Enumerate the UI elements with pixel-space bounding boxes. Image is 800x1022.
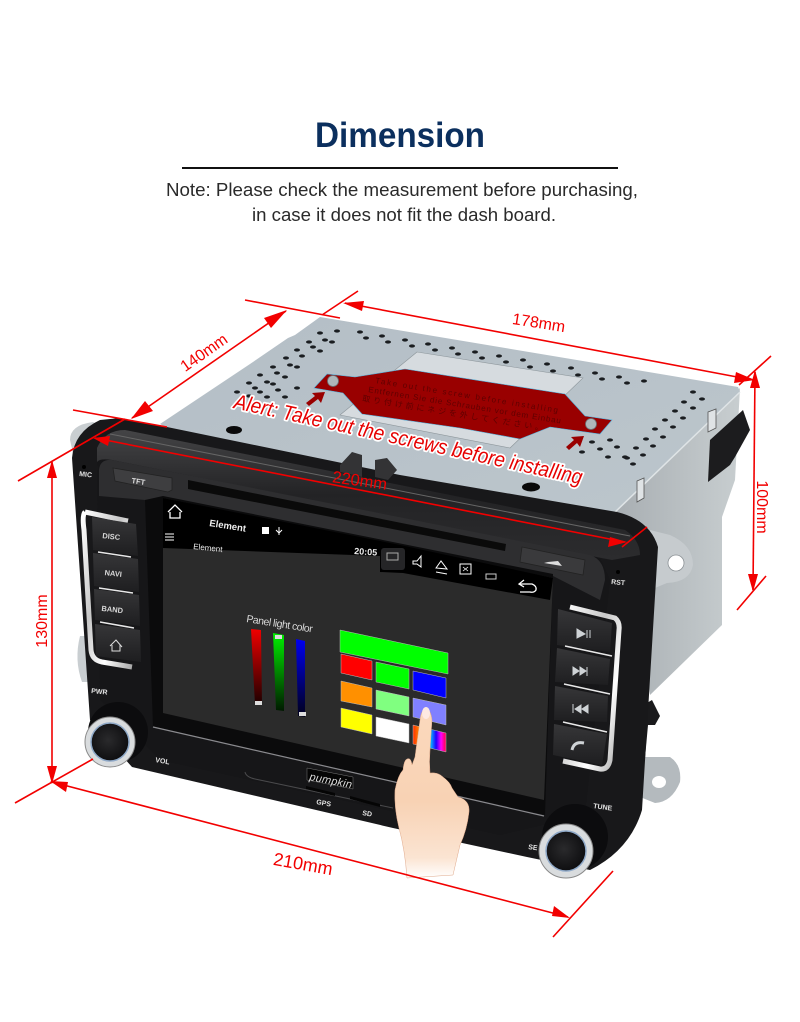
panel labels: SE <box>528 844 538 852</box>
panel labels: GPS <box>316 799 332 809</box>
vent holes <box>234 329 705 466</box>
panel labels: SD <box>362 810 372 819</box>
gloss line on bevel <box>110 434 630 536</box>
TFT button <box>113 468 172 492</box>
top center clips <box>340 452 397 480</box>
icon: speaker <box>413 556 421 567</box>
icon: home <box>168 505 182 518</box>
BAND button <box>94 589 140 626</box>
left buttons <box>92 517 141 662</box>
screen frame <box>145 496 553 815</box>
panel labels: PWR <box>91 688 108 697</box>
dimension: 220mm <box>93 436 647 547</box>
pumpkin logo: pumpkin <box>307 771 353 791</box>
DISC button <box>92 517 138 556</box>
right chrome bracket <box>563 607 619 769</box>
dimension: 140mm <box>18 310 287 481</box>
black side clip <box>708 410 750 482</box>
right knob <box>539 804 608 878</box>
icon: pointing hand <box>395 707 469 878</box>
left knob <box>85 702 148 767</box>
NAVI button <box>93 553 139 592</box>
large mounting holes <box>226 426 242 434</box>
clock: 20:05 <box>354 546 378 558</box>
previous button <box>554 686 608 722</box>
dimension: 130mm <box>15 460 93 803</box>
heading: Element: Element <box>209 518 248 535</box>
lower bezel gloss <box>153 727 544 816</box>
red warning label: Entfernen Sie die Schrauben vor dem Einbau <box>368 385 562 425</box>
dimension: 220mm: 220mm <box>331 468 388 494</box>
chassis top plate <box>160 317 740 515</box>
screws <box>328 376 596 430</box>
panel labels <box>79 471 626 852</box>
NAVI button: NAVI <box>104 568 122 579</box>
dimension: 210mm <box>50 781 613 937</box>
upper gray panel section <box>99 460 605 600</box>
color swatches <box>340 630 448 752</box>
icon: menu <box>165 534 174 540</box>
left mounting tabs <box>70 422 105 682</box>
panel labels: VOL <box>155 757 171 767</box>
green slider <box>273 633 284 711</box>
panel light color sliders <box>246 613 314 717</box>
inner black panel <box>97 459 610 835</box>
note text <box>166 179 638 225</box>
red warning label <box>314 369 612 439</box>
edge between top and side <box>612 392 740 515</box>
chassis side panel <box>615 388 740 695</box>
play pause button <box>557 609 612 652</box>
top bevel band <box>97 430 640 560</box>
screen status icons and labels <box>165 505 536 592</box>
MIC and RST holes <box>82 465 620 574</box>
call button <box>553 724 607 765</box>
dimension: 178mm: 178mm <box>511 311 566 336</box>
BAND button: BAND <box>101 604 124 615</box>
status bar <box>163 498 553 600</box>
red slider <box>251 629 262 705</box>
small arrows to screws <box>306 392 584 450</box>
panel labels: MIC <box>79 471 92 479</box>
right mounting tab top <box>650 530 693 590</box>
car stereo chassis <box>70 317 750 803</box>
dimension: 140mm: 140mm <box>178 331 231 376</box>
red warning label: 取り付け前にネジを外してください。 <box>362 393 544 433</box>
disc slot <box>188 480 506 551</box>
icon: back <box>519 580 536 592</box>
subheading: Element: Element <box>193 542 224 554</box>
TFT button: TFT <box>131 476 146 487</box>
screen display <box>163 498 553 800</box>
panel labels: TUNE <box>593 803 613 813</box>
slider heading: Panel light color <box>246 613 314 636</box>
home button <box>95 624 141 662</box>
title underline <box>182 167 618 169</box>
icon: image <box>262 527 269 534</box>
alert text: Alert: Take out the screws before installing <box>230 390 585 489</box>
next button <box>555 648 610 685</box>
paper sticker <box>340 352 583 448</box>
icon: close <box>460 564 471 574</box>
right mounting tab bottom <box>637 700 680 803</box>
dimension: 178mm <box>245 291 771 385</box>
right buttons <box>553 609 612 765</box>
red warning label: Take out the screw before installing <box>375 376 559 415</box>
DISC button: DISC <box>102 531 121 542</box>
note text: in case it does not fit the dash board. <box>252 204 556 225</box>
separators right <box>563 646 612 732</box>
side clips <box>637 409 716 502</box>
dimension: 100mm: 100mm <box>753 480 770 534</box>
button separators <box>98 552 134 628</box>
icon: windows <box>486 574 496 579</box>
note text: Note: Please check the measurement before purchasing, <box>166 179 638 200</box>
dimension: 210mm: 210mm <box>272 849 334 879</box>
eject button <box>520 547 585 575</box>
icon: camera tab <box>381 548 405 570</box>
front panel <box>72 418 658 878</box>
dimension: 100mm <box>737 370 770 610</box>
icon: usb <box>276 527 282 535</box>
front slots <box>245 772 393 808</box>
left chrome bracket <box>83 512 132 667</box>
dimension: 130mm: 130mm <box>34 594 51 648</box>
outer bezel <box>72 418 658 870</box>
blue slider <box>296 639 306 717</box>
panel labels: RST <box>611 579 626 587</box>
icon: eject <box>436 561 447 574</box>
title: Dimension <box>315 116 485 155</box>
